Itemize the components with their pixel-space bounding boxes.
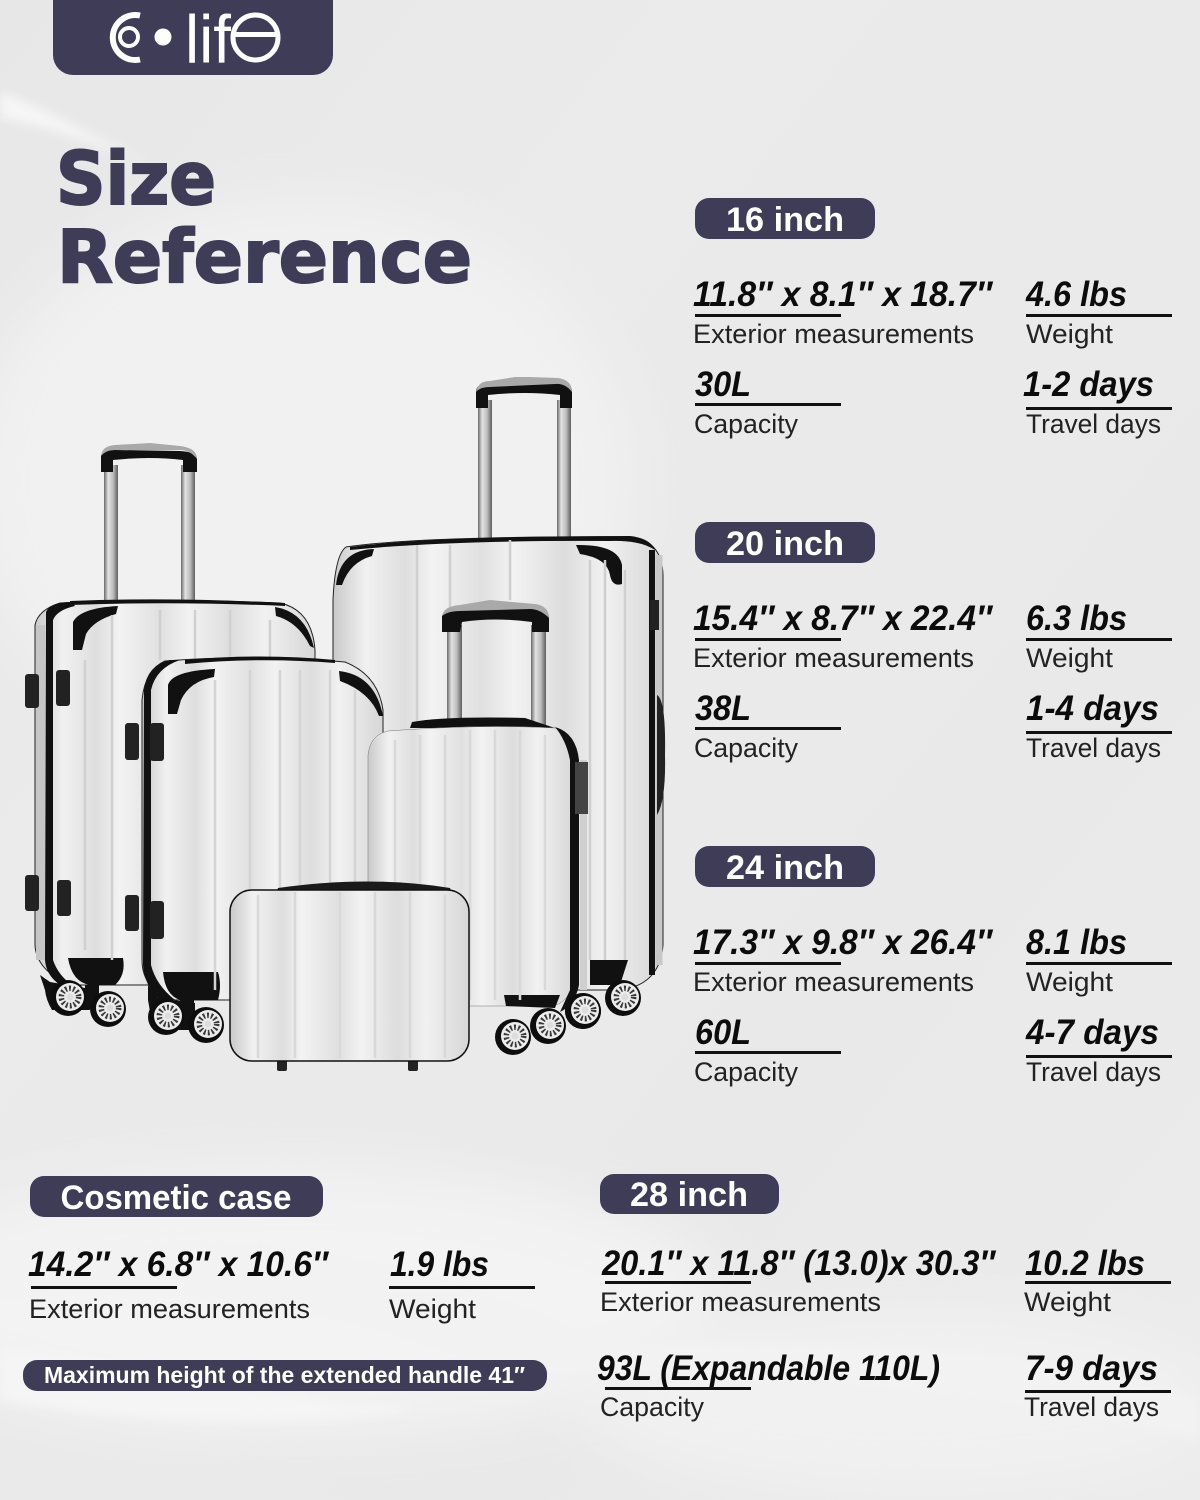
weight: [1026, 599, 1172, 673]
title: Size: [56, 137, 216, 222]
size pill: 28 inch: [630, 1176, 748, 1214]
weight: Weight: [389, 1294, 477, 1324]
travel days: [1023, 365, 1172, 439]
capacity: 60L: [695, 1013, 751, 1052]
size pill: 20 inch: [726, 525, 844, 563]
handle height callout: Maximum height of the extended handle 41″: [44, 1362, 525, 1388]
exterior measurements: [28, 1245, 330, 1324]
exterior measurements: 15.4″ x 8.7″ x 22.4″: [693, 599, 994, 638]
weight: 10.2 lbs: [1025, 1244, 1145, 1283]
travel days: [1026, 689, 1172, 763]
weight: Weight: [1024, 1287, 1112, 1317]
exterior measurements: Exterior measurements: [29, 1294, 310, 1324]
exterior measurements: 20.1″ x 11.8″ (13.0)x 30.3″: [601, 1244, 997, 1283]
logo badge: [53, 0, 333, 78]
exterior measurements: 14.2″ x 6.8″ x 10.6″: [28, 1245, 330, 1284]
capacity: [597, 1349, 940, 1422]
weight: [1026, 923, 1172, 997]
exterior measurements: [693, 275, 994, 349]
title: [56, 137, 472, 300]
exterior measurements: [600, 1244, 997, 1317]
logo mark: Coolife: [113, 2, 278, 78]
exterior measurements: 11.8″ x 8.1″ x 18.7″: [693, 275, 994, 314]
capacity: Capacity: [694, 409, 798, 439]
weight: 8.1 lbs: [1026, 923, 1127, 962]
suitcase: 16 inch: [368, 600, 601, 1055]
weight: [1024, 1244, 1171, 1317]
travel days: 4-7 days: [1025, 1013, 1159, 1052]
capacity: 93L (Expandable 110L): [597, 1349, 940, 1388]
travel days: [1024, 1349, 1171, 1422]
size pill: [600, 1174, 779, 1214]
travel days: Travel days: [1026, 409, 1161, 439]
travel days: Travel days: [1024, 1392, 1159, 1422]
capacity: 30L: [695, 365, 751, 404]
capacity: Capacity: [600, 1392, 704, 1422]
capacity: [694, 365, 841, 439]
travel days: Travel days: [1026, 1057, 1161, 1087]
weight: [1025, 275, 1172, 349]
exterior measurements: 17.3″ x 9.8″ x 26.4″: [693, 923, 994, 962]
suitcase: 20 inch: [125, 656, 383, 1043]
travel days: Travel days: [1026, 733, 1161, 763]
section: 28 inch: [597, 1174, 1171, 1422]
capacity: 38L: [695, 689, 751, 728]
section: cosmetic case: [23, 1176, 547, 1391]
weight: 1.9 lbs: [390, 1245, 489, 1284]
capacity: Capacity: [694, 733, 798, 763]
capacity: [694, 1013, 841, 1087]
travel days: 1-2 days: [1023, 365, 1154, 404]
weight: Weight: [1026, 643, 1114, 673]
suitcase: 24 inch: [25, 443, 315, 1027]
size pill: [695, 522, 875, 563]
luggage set photo: [25, 377, 665, 1071]
logo mark: Coolife: lif: [185, 2, 231, 78]
travel days: 7-9 days: [1025, 1349, 1158, 1388]
travel days: 1-4 days: [1026, 689, 1159, 728]
weight: Weight: [1026, 319, 1114, 349]
weight: 6.3 lbs: [1026, 599, 1127, 638]
exterior measurements: [693, 923, 994, 997]
weight: [389, 1245, 535, 1324]
capacity: [694, 689, 841, 763]
section: 20 inch: [693, 522, 1172, 763]
travel days: [1025, 1013, 1172, 1087]
exterior measurements: Exterior measurements: [693, 643, 974, 673]
exterior measurements: Exterior measurements: [693, 319, 974, 349]
exterior measurements: Exterior measurements: [693, 967, 974, 997]
weight: 4.6 lbs: [1025, 275, 1127, 314]
size pill: [695, 198, 875, 239]
size pill: 24 inch: [726, 849, 844, 887]
exterior measurements: [693, 599, 994, 673]
section: 16 inch: [693, 198, 1172, 439]
weight: Weight: [1026, 967, 1114, 997]
suitcase: 28 inch: [333, 377, 665, 1029]
size pill: 16 inch: [726, 201, 844, 239]
section: 24 inch: [693, 846, 1172, 1087]
cosmetic case: [230, 882, 469, 1071]
size pill: [695, 846, 875, 887]
size pill: Cosmetic case: [60, 1179, 292, 1217]
title: Reference: [57, 215, 472, 300]
exterior measurements: Exterior measurements: [600, 1287, 881, 1317]
capacity: Capacity: [694, 1057, 798, 1087]
